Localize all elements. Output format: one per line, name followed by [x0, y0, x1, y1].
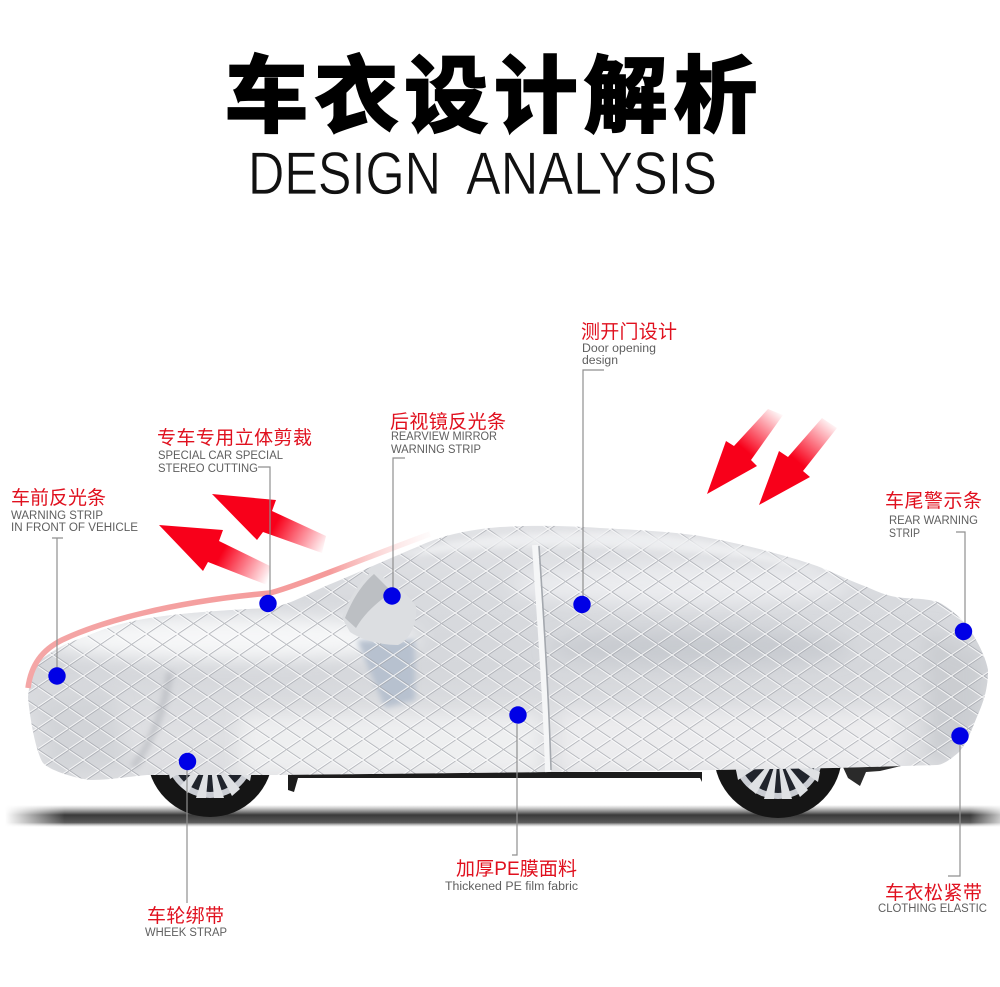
label: thickened PE fabric	[445, 858, 578, 893]
leader lines	[52, 370, 965, 903]
label: door opening	[581, 321, 677, 367]
side mirror	[342, 570, 416, 645]
label: special stereo cutting: STEREO CUTTING	[158, 463, 258, 475]
label: rear warning strip: STRIP	[889, 528, 920, 540]
label: thickened PE fabric: Thickened PE film fabric	[445, 881, 578, 893]
label: clothing elastic: CLOTHING ELASTIC	[878, 903, 987, 915]
label: rear warning strip: REAR WARNING	[889, 515, 978, 527]
label: front warning strip	[11, 487, 138, 534]
underbody sill	[288, 772, 702, 792]
arrow: red lower right	[759, 418, 837, 505]
label: special stereo cutting	[157, 427, 312, 475]
label: front warning strip: WARNING STRIP	[11, 510, 103, 522]
arrow: red upper right	[707, 409, 783, 494]
arrow: red lower left front	[159, 525, 270, 585]
label: wheel strap: 车轮绑带	[147, 905, 224, 927]
front wheel	[147, 691, 273, 817]
car	[20, 520, 1000, 818]
label: wheel strap	[145, 905, 227, 939]
label: rearview mirror strip: REARVIEW MIRROR	[391, 431, 497, 443]
label: rearview mirror strip: WARNING STRIP	[391, 444, 481, 456]
label: special stereo cutting: 专车专用立体剪裁	[157, 427, 312, 449]
label: door opening: design	[582, 355, 618, 367]
door opening seam	[535, 545, 548, 772]
label: front warning strip: IN FRONT OF VEHICLE	[11, 522, 138, 534]
label: thickened PE fabric: 加厚PE膜面料	[456, 858, 577, 880]
silver quilted cover	[20, 520, 1000, 790]
ground shadow	[5, 805, 1000, 827]
label: front warning strip: 车前反光条	[11, 487, 106, 509]
label: clothing elastic: 车衣松紧带	[885, 882, 982, 904]
front reflective red strip	[28, 534, 430, 688]
label: wheel strap: WHEEK STRAP	[145, 927, 227, 939]
label: special stereo cutting: SPECIAL CAR SPECIAL	[158, 450, 284, 462]
mirror folds	[345, 574, 392, 628]
label: rearview mirror strip	[390, 411, 506, 456]
marker dots	[48, 587, 972, 770]
rear wheel	[714, 690, 842, 818]
label: clothing elastic	[878, 882, 987, 915]
rear bumper underside	[842, 765, 905, 786]
label: rear warning strip	[885, 490, 982, 540]
title: 车衣设计解析	[225, 50, 757, 143]
label: door opening: 测开门设计	[581, 321, 677, 343]
subtitle	[248, 140, 717, 207]
subtitle: ANALYSIS	[466, 140, 717, 207]
label: rear warning strip: 车尾警示条	[885, 490, 982, 512]
label: rearview mirror strip: 后视镜反光条	[390, 411, 506, 433]
subtitle: DESIGN	[248, 140, 441, 207]
label: door opening: Door opening	[582, 343, 656, 355]
arrow: red upper left front	[212, 494, 326, 553]
